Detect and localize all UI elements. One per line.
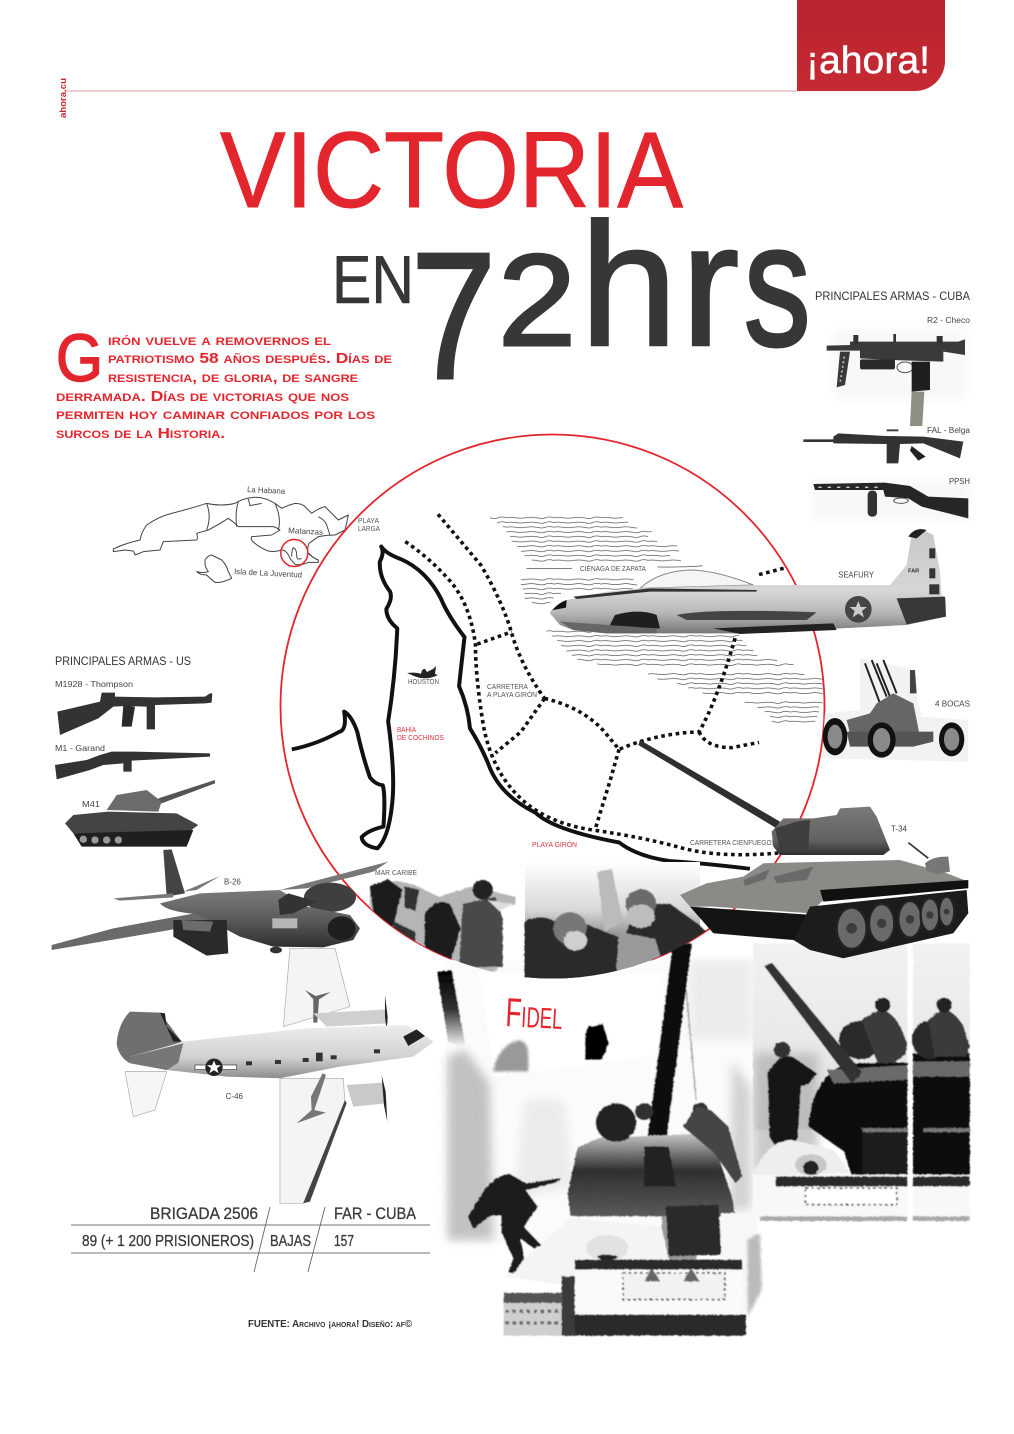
Fidel crowd photo [525, 904, 714, 985]
wetland hatching [490, 515, 823, 724]
map labels: BAHÍA [397, 725, 416, 734]
jumping soldier [468, 1173, 561, 1274]
map labels: DE COCHINOS [397, 735, 444, 742]
gun Garand [55, 752, 210, 779]
locator map of Cuba: Matanzas [288, 526, 323, 537]
brand tab [797, 0, 945, 91]
weapons: US: M1 - Garand [55, 744, 105, 753]
map labels: HOUSTON [408, 679, 439, 686]
header rule [65, 90, 797, 92]
casualties table: BRIGADA 2506 [150, 1205, 258, 1223]
casualties table: BAJAS [270, 1233, 311, 1250]
casualties table: 157 [334, 1233, 354, 1250]
weapons: US [55, 656, 215, 847]
torn paper with smudges [479, 973, 669, 1077]
handwritten word FIDEL: FIDEL [505, 990, 564, 1038]
intro paragraph [56, 321, 392, 442]
title: EN 72hrs: EN [332, 242, 414, 318]
dotted roads [405, 514, 786, 855]
map circle: Bay of Pigs [280, 434, 824, 978]
aircraft Seafury: SEAFURY [838, 570, 875, 579]
anti-aircraft gun 4 bocas: 4 BOCAS [935, 699, 970, 708]
main photo: tank front with soldiers [437, 943, 762, 1336]
tank T-34 [638, 740, 968, 958]
intro paragraph: patriotismo 58 años después. Días de [108, 350, 392, 367]
title: EN 72hrs: 2 [498, 228, 576, 373]
map labels: MAR CARIBE [375, 870, 417, 877]
aircraft Seafury: FAR [908, 568, 919, 574]
title: EN 72hrs: h [580, 188, 677, 383]
tank T-34: T-34 [891, 824, 908, 833]
aircraft Seafury [550, 528, 946, 634]
map labels: CIÉNAGA DE ZAPATA [580, 564, 646, 573]
weapon labels [927, 316, 971, 486]
locator map of Cuba [113, 485, 348, 582]
brand tab: ¡ahora! [806, 40, 930, 82]
inset photos clipped to the circle [370, 862, 714, 985]
locator map of Cuba: La Habana [247, 485, 286, 496]
anti-aircraft gun 4 bocas [822, 658, 970, 762]
source credit: FUENTE: Archivo ¡ahora! Diseño: af© [248, 1319, 413, 1330]
weapons: US: PRINCIPALES ARMAS - US [55, 656, 191, 668]
title: EN 72hrs: 7 [411, 216, 496, 417]
tank M41 [65, 780, 215, 847]
locator map of Cuba: Isla de La Juventud [234, 567, 302, 580]
barrel [646, 943, 692, 1151]
aircraft C-46 [117, 948, 434, 1203]
map labels: CARRETERA CIENFUEGOS [690, 840, 776, 847]
intro paragraph: derramada. Días de victorias que nos [56, 388, 349, 405]
tank hull [568, 1133, 735, 1216]
map labels [358, 518, 776, 877]
weapon labels: FAL - Belga [927, 426, 971, 435]
gun PPSH [813, 480, 970, 520]
weapons: Cuba [803, 289, 971, 520]
weapons: Cuba: PRINCIPALES ARMAS - CUBA [815, 289, 970, 303]
weapon labels: R2 - Checo [927, 316, 971, 325]
right photo: tank with soldiers, repeated strip [753, 943, 971, 1221]
map labels: CARRETERA [487, 684, 528, 691]
map labels: A PLAYA GIRÓN [487, 690, 537, 699]
weapons: US: M1928 - Thompson [55, 680, 133, 689]
title: VICTORIA: VICTORIA [220, 109, 683, 230]
casualties table: FAR - CUBA [334, 1205, 416, 1223]
gun FAL [803, 429, 963, 463]
map labels: PLAYA [358, 518, 379, 525]
casualties table: 89 (+ 1 200 PRISIONEROS) [82, 1233, 254, 1250]
title: EN 72hrs [332, 186, 810, 417]
weapons: US: M41 [82, 800, 101, 809]
weapon labels: PPSH [949, 477, 970, 486]
map labels: LARGA [358, 526, 380, 533]
intro paragraph: irón vuelve a removernos el [108, 332, 331, 349]
prisoners group [370, 881, 515, 978]
map labels: PLAYA GIRÓN [532, 840, 577, 849]
aircraft B-26 [52, 849, 388, 956]
coastline [292, 547, 750, 869]
intro paragraph: surcos de la Historia. [56, 425, 225, 442]
gun R2 [827, 330, 967, 426]
title: EN 72hrs: r [681, 188, 739, 383]
title: EN 72hrs: s [744, 186, 810, 382]
intro paragraph: permiten hoy caminar confiados por los [56, 406, 375, 423]
gun Thompson [57, 693, 212, 735]
black strip top left [437, 970, 466, 1048]
intro paragraph: resistencia, de gloria, de sangre [108, 369, 358, 386]
vertical site label: ahora.cu [58, 78, 68, 118]
casualties table [71, 1205, 430, 1272]
aircraft B-26: B-26 [224, 877, 241, 886]
intro paragraph: G [56, 321, 103, 396]
aircraft C-46: C-46 [226, 1092, 244, 1101]
